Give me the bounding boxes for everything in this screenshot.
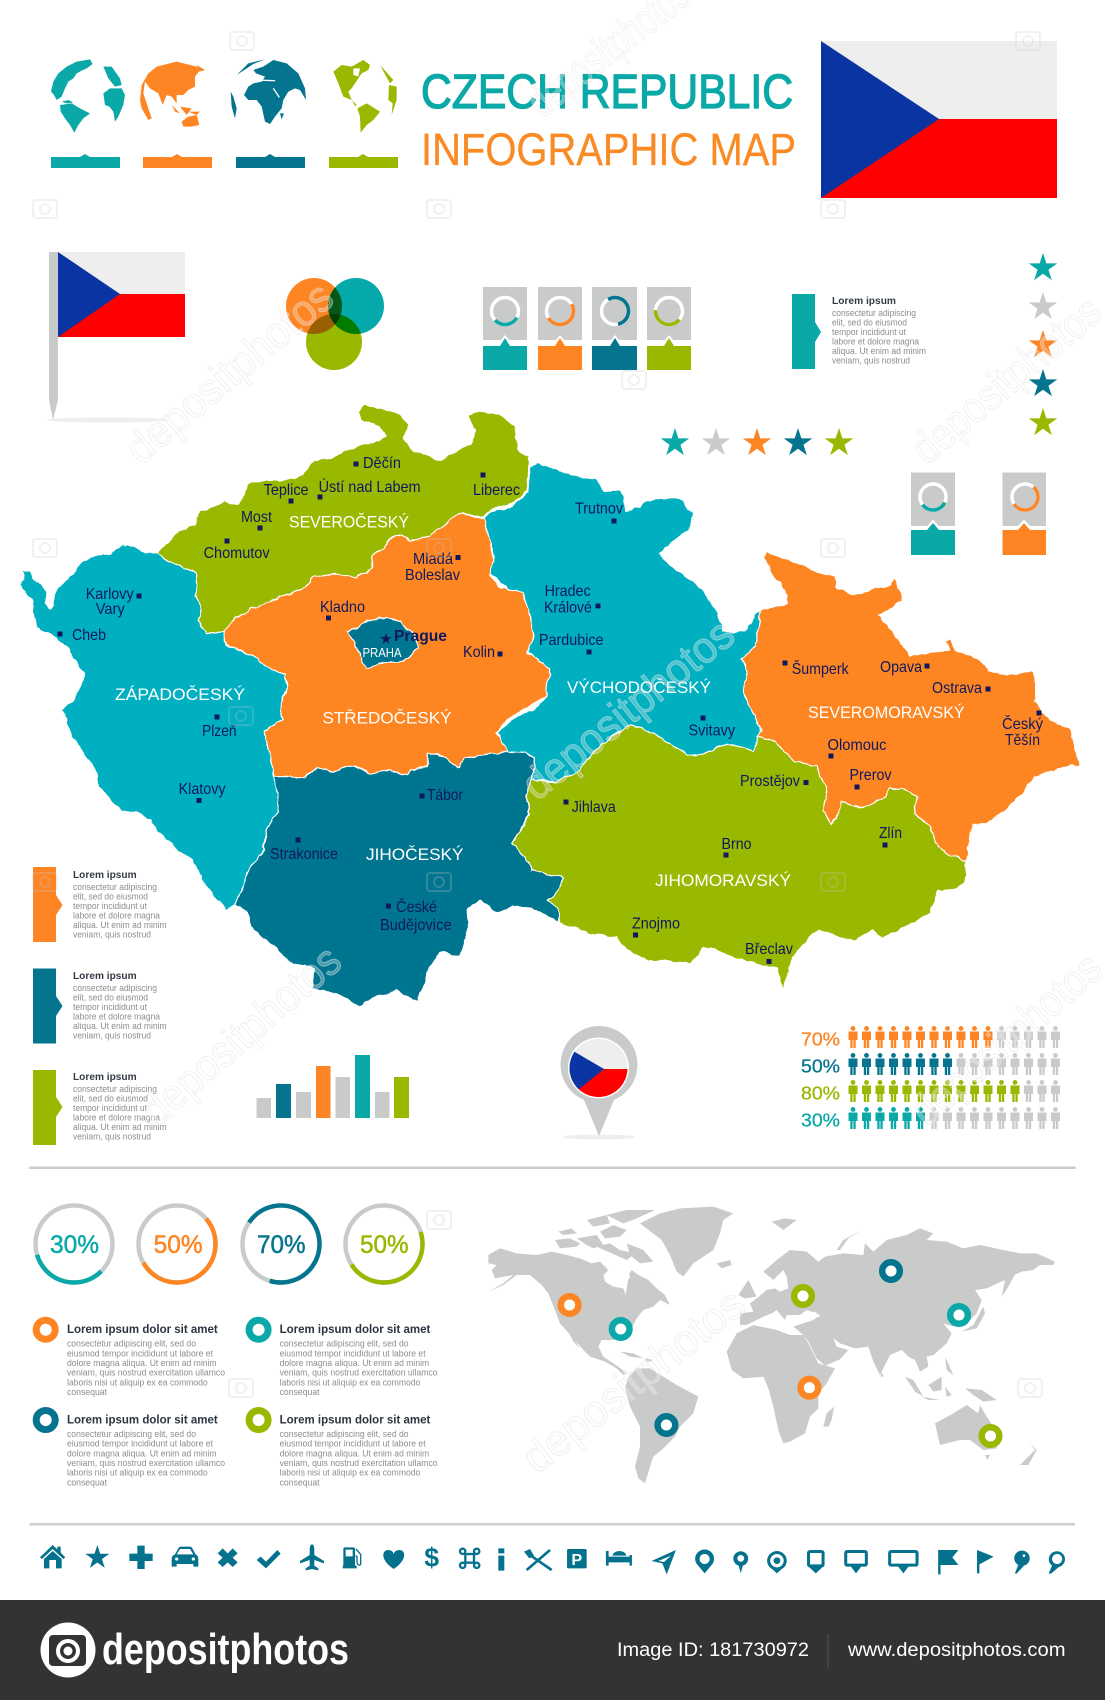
- region: Jihomoravský: [512, 725, 967, 991]
- text item: teal: consequat: [280, 1387, 320, 1398]
- watermarks: depositphotos: [513, 1279, 754, 1483]
- icon: info: [498, 1548, 504, 1571]
- map labels: JIHOMORAVSKÝ: [655, 871, 791, 890]
- text item: teal: laboris nisi ut aliquip ex ea commodo: [280, 1377, 420, 1388]
- text item: teal: [249, 1320, 438, 1398]
- text item: teal: veniam, quis nostrud exercitation ullamco: [280, 1368, 438, 1379]
- circle: 70%: [228, 1191, 334, 1297]
- text item: green: Lorem ipsum dolor sit amet: [280, 1414, 430, 1426]
- icon: check: [257, 1550, 281, 1568]
- icon: parking: P: [571, 1551, 583, 1569]
- teal lorem block: veniam, quis nostrud: [832, 356, 910, 366]
- row: 50%: 50%: [801, 1057, 840, 1077]
- icon: fuel: [343, 1547, 361, 1568]
- people percentage chart: [801, 1026, 1060, 1131]
- map labels: Olomouc: [828, 737, 886, 754]
- Czech map regions: [20, 404, 1080, 1007]
- text item: blue: [36, 1410, 225, 1488]
- icon: flag: [938, 1550, 958, 1574]
- lorem block: orange: elit, sed do eiusmod: [73, 892, 148, 902]
- text item: green: veniam, quis nostrud exercitation ullamco: [280, 1458, 438, 1469]
- region: Západočeský: [20, 543, 287, 911]
- two ring cards near map: [911, 472, 1046, 555]
- globe icons row: [51, 59, 397, 133]
- text item: teal: Lorem ipsum dolor sit amet: [280, 1324, 430, 1336]
- circle: 50% green: [335, 1195, 433, 1293]
- title: CZECH REPUBLIC: [421, 66, 793, 119]
- text item: orange: eiusmod tempor incididunt ut labore et: [67, 1348, 213, 1359]
- row: 80%: 80%: [801, 1084, 840, 1104]
- text item: green: eiusmod tempor incididunt ut labore et: [280, 1439, 426, 1450]
- icon: close: [218, 1548, 238, 1567]
- row: 70%: 70%: [801, 1030, 840, 1050]
- Eurasia, Africa and Oceania: [727, 1218, 1055, 1465]
- map labels: Kolin: [463, 644, 495, 661]
- venn circles: [286, 278, 384, 370]
- lorem block: orange: aliqua. Ut enim ad minim: [73, 920, 167, 930]
- map labels: Prague: [394, 628, 447, 645]
- icon: bed: [606, 1551, 632, 1566]
- icon: pennant: [977, 1550, 994, 1573]
- icon: pin dot: [767, 1551, 787, 1573]
- text item: orange: Lorem ipsum dolor sit amet: [67, 1324, 218, 1336]
- text item: orange: [36, 1320, 225, 1398]
- progress circles: [20, 1190, 433, 1298]
- text item: green: consectetur adipiscing elit, sed do: [280, 1429, 409, 1440]
- icons left half: [40, 1543, 552, 1573]
- icon: dollar: $: [424, 1543, 439, 1573]
- map labels: Boleslav: [405, 567, 460, 584]
- region: Středočeský: [223, 513, 550, 778]
- text item: green: dolore magna aliqua. Ut enim ad minim: [280, 1448, 429, 1459]
- icon: bubble wide: [888, 1550, 919, 1573]
- world markers: [561, 1262, 999, 1445]
- watermarks: depositphotos: [131, 936, 351, 1136]
- lorem block: green: Lorem ipsum: [73, 1072, 137, 1083]
- map labels: Liberec: [473, 482, 520, 499]
- map labels: Svitavy: [688, 722, 735, 740]
- city markers: [58, 462, 1042, 964]
- circle: 50% orange: [123, 1190, 231, 1298]
- teal lorem block: Lorem ipsum: [832, 296, 896, 307]
- row: 30%: [801, 1107, 1060, 1131]
- watermarks: depositphotos: [116, 272, 343, 474]
- world map: [488, 1207, 1055, 1483]
- icon: heart: [383, 1550, 404, 1569]
- icon: home: [40, 1545, 65, 1568]
- text item: green: [249, 1410, 438, 1488]
- map labels: Budějovice: [380, 917, 452, 934]
- map labels: Opava: [880, 659, 922, 676]
- map labels: Ostrava: [932, 680, 982, 697]
- map labels: SEVEROČESKÝ: [289, 512, 409, 532]
- map labels: VÝCHODOČESKÝ: [567, 678, 711, 697]
- row: 50%: [801, 1053, 1060, 1077]
- icon: command: [460, 1549, 479, 1568]
- map labels: Tábor: [427, 787, 464, 804]
- map labels: Karlovy: [86, 586, 134, 603]
- lorem block: orange: tempor incididunt ut: [73, 901, 147, 911]
- globe: green: [333, 60, 397, 133]
- row: 30%: 30%: [801, 1111, 840, 1131]
- icon: navigation: [652, 1550, 676, 1574]
- globe base bars: [51, 154, 398, 168]
- lorem block: blue: aliqua. Ut enim ad minim: [73, 1021, 167, 1031]
- icon: plane: [300, 1544, 324, 1570]
- map labels: České: [396, 897, 437, 916]
- icon: bubble medium: [844, 1550, 868, 1573]
- text item: teal: eiusmod tempor incididunt ut labore et: [280, 1348, 426, 1359]
- footer logo: depositphotos: [102, 1625, 349, 1674]
- flag on pole: [46, 252, 185, 422]
- teal lorem block: [792, 294, 926, 369]
- lorem block: green: consectetur adipiscing: [73, 1084, 157, 1094]
- icon: round pin outline: [1049, 1551, 1065, 1574]
- map labels: Most: [241, 509, 272, 526]
- map labels: Plzeň: [202, 723, 237, 740]
- lorem block: blue: elit, sed do eiusmod: [73, 992, 148, 1002]
- map labels: Prerov: [850, 767, 892, 784]
- lorem block: orange: labore et dolore magna: [73, 911, 160, 921]
- lorem block: orange: consectetur adipiscing: [73, 882, 157, 892]
- icon: plus: [129, 1546, 153, 1569]
- map labels: Vary: [96, 601, 125, 618]
- lorem block: orange: Lorem ipsum: [73, 870, 137, 881]
- footer bar: [0, 1600, 1105, 1700]
- map labels: Břeclav: [745, 941, 793, 958]
- globe: orange: [140, 62, 205, 127]
- lorem block: orange: veniam, quis nostrud: [73, 930, 151, 940]
- lorem block: green: [33, 1070, 167, 1145]
- region: Východočeský: [484, 462, 761, 782]
- map labels: SEVEROMORAVSKÝ: [808, 703, 965, 722]
- text item: teal: consectetur adipiscing elit, sed do: [280, 1339, 409, 1350]
- map labels: Jihlava: [572, 799, 616, 816]
- map labels: Chomutov: [204, 545, 270, 562]
- lorem block: blue: labore et dolore magna: [73, 1012, 160, 1022]
- watermarks: depositphotos: [512, 609, 744, 810]
- text item: blue: consequat: [67, 1477, 107, 1488]
- circle: 50% green: 50%: [360, 1231, 409, 1259]
- icon: round pin: [1014, 1551, 1030, 1574]
- lorem block: green: tempor incididunt ut: [73, 1103, 147, 1113]
- map labels: Prostějov: [740, 773, 800, 790]
- map labels: Králové: [544, 600, 592, 616]
- horizontal stars: [661, 428, 853, 455]
- text item: blue: veniam, quis nostrud exercitation ullamco: [67, 1458, 225, 1469]
- map labels: Mladá: [413, 551, 453, 568]
- region group west: [20, 404, 564, 1007]
- circle: 50% orange: 50%: [154, 1231, 203, 1259]
- row: 70%: [801, 1026, 1060, 1050]
- icon: pin small: [733, 1551, 748, 1573]
- map labels: ZÁPADOČESKÝ: [115, 685, 245, 704]
- lorem block: green: labore et dolore magna: [73, 1113, 160, 1123]
- text item: blue: consectetur adipiscing elit, sed do: [67, 1429, 196, 1440]
- teal lorem block: consectetur adipiscing: [832, 308, 916, 318]
- lorem block: blue: [33, 968, 167, 1044]
- map labels: Pardubice: [539, 632, 604, 649]
- map labels: Děčín: [363, 455, 401, 472]
- text item: orange: veniam, quis nostrud exercitation ullamco: [67, 1368, 225, 1379]
- location pin with flag: [560, 1026, 638, 1140]
- circle: 30%: [20, 1190, 128, 1298]
- map labels: Klatovy: [179, 781, 226, 798]
- text item: blue: laboris nisi ut aliquip ex ea commodo: [67, 1468, 208, 1479]
- map labels: STŘEDOČESKÝ: [322, 708, 452, 728]
- lorem block: blue: veniam, quis nostrud: [73, 1031, 151, 1041]
- text item: blue: eiusmod tempor incididunt ut labore et: [67, 1439, 213, 1450]
- lorem block: blue: consectetur adipiscing: [73, 983, 157, 993]
- icon: pin ring: [695, 1549, 714, 1573]
- text item: blue: dolore magna aliqua. Ut enim ad minim: [67, 1448, 217, 1459]
- map labels: Znojmo: [632, 916, 680, 932]
- map labels: Strakonice: [270, 846, 338, 863]
- title: INFOGRAPHIC MAP: [421, 124, 796, 175]
- text item: blue: Lorem ipsum dolor sit amet: [67, 1414, 218, 1426]
- icon: bubble small: [807, 1550, 825, 1573]
- teal lorem block: elit, sed do eiusmod: [832, 318, 907, 328]
- text item: orange: consectetur adipiscing elit, sed do: [67, 1339, 196, 1350]
- image id: Image ID: 181730972: [617, 1640, 809, 1661]
- region: Severomoravský: [741, 552, 1080, 861]
- lorem block: green: veniam, quis nostrud: [73, 1132, 151, 1142]
- lorem block: green: aliqua. Ut enim ad minim: [73, 1122, 167, 1132]
- text item: orange: dolore magna aliqua. Ut enim ad minim: [67, 1358, 217, 1369]
- website: www.depositphotos.com: [847, 1640, 1066, 1661]
- teal lorem block: aliqua. Ut enim ad minim: [832, 346, 926, 356]
- map labels: Kladno: [320, 599, 365, 616]
- region group east: [484, 462, 1080, 991]
- circle: 70%: 70%: [257, 1231, 306, 1259]
- icon: car: [172, 1547, 198, 1567]
- circle: 30%: 30%: [50, 1231, 99, 1259]
- map labels: Teplice: [264, 482, 309, 499]
- Americas and Greenland: [488, 1207, 733, 1483]
- teal lorem block: labore et dolore magna: [832, 336, 919, 346]
- icon: fork and knife: [524, 1549, 552, 1570]
- large flag: [821, 41, 1057, 198]
- map labels: Cheb: [72, 627, 106, 644]
- map labels: Hradec: [545, 583, 591, 600]
- map labels: JIHOČESKÝ: [366, 845, 464, 864]
- bar chart: [256, 1055, 409, 1118]
- text item: green: laboris nisi ut aliquip ex ea commodo: [280, 1468, 420, 1479]
- four ring cards: [483, 287, 691, 370]
- vertical stars: [1029, 253, 1057, 435]
- row: 80%: [801, 1080, 1060, 1104]
- lorem block: green: elit, sed do eiusmod: [73, 1094, 148, 1104]
- lorem block: orange: [33, 867, 167, 942]
- globe: blue: [231, 59, 306, 124]
- map labels: Brno: [722, 836, 752, 853]
- region: Praha: [348, 617, 419, 669]
- icon: star: [85, 1545, 109, 1568]
- map labels: PRAHA: [362, 645, 402, 660]
- map labels: Český: [1002, 714, 1043, 733]
- text item: orange: consequat: [67, 1387, 107, 1398]
- text item: orange: laboris nisi ut aliquip ex ea commodo: [67, 1377, 208, 1388]
- teal lorem block: tempor incididunt ut: [832, 327, 906, 337]
- icon row: [40, 1543, 1065, 1574]
- icons right half: [567, 1549, 1065, 1574]
- map labels: Ústí nad Labem: [319, 477, 421, 496]
- region: Severočeský: [157, 404, 529, 633]
- map labels: [72, 455, 1043, 958]
- title: [421, 66, 796, 175]
- text item: teal: dolore magna aliqua. Ut enim ad minim: [280, 1358, 429, 1369]
- icon: parking: [567, 1549, 587, 1569]
- map labels: Šumperk: [792, 659, 850, 678]
- map labels: Trutnov: [575, 500, 623, 518]
- region: Jihočeský: [234, 752, 564, 1007]
- globe: teal: [51, 59, 125, 133]
- map labels: Zlín: [879, 825, 902, 842]
- map labels: Těšín: [1005, 732, 1040, 749]
- text item: green: consequat: [280, 1477, 320, 1488]
- lorem block: blue: Lorem ipsum: [73, 971, 137, 982]
- lorem block: blue: tempor incididunt ut: [73, 1002, 147, 1012]
- footer logo: [40, 1622, 349, 1678]
